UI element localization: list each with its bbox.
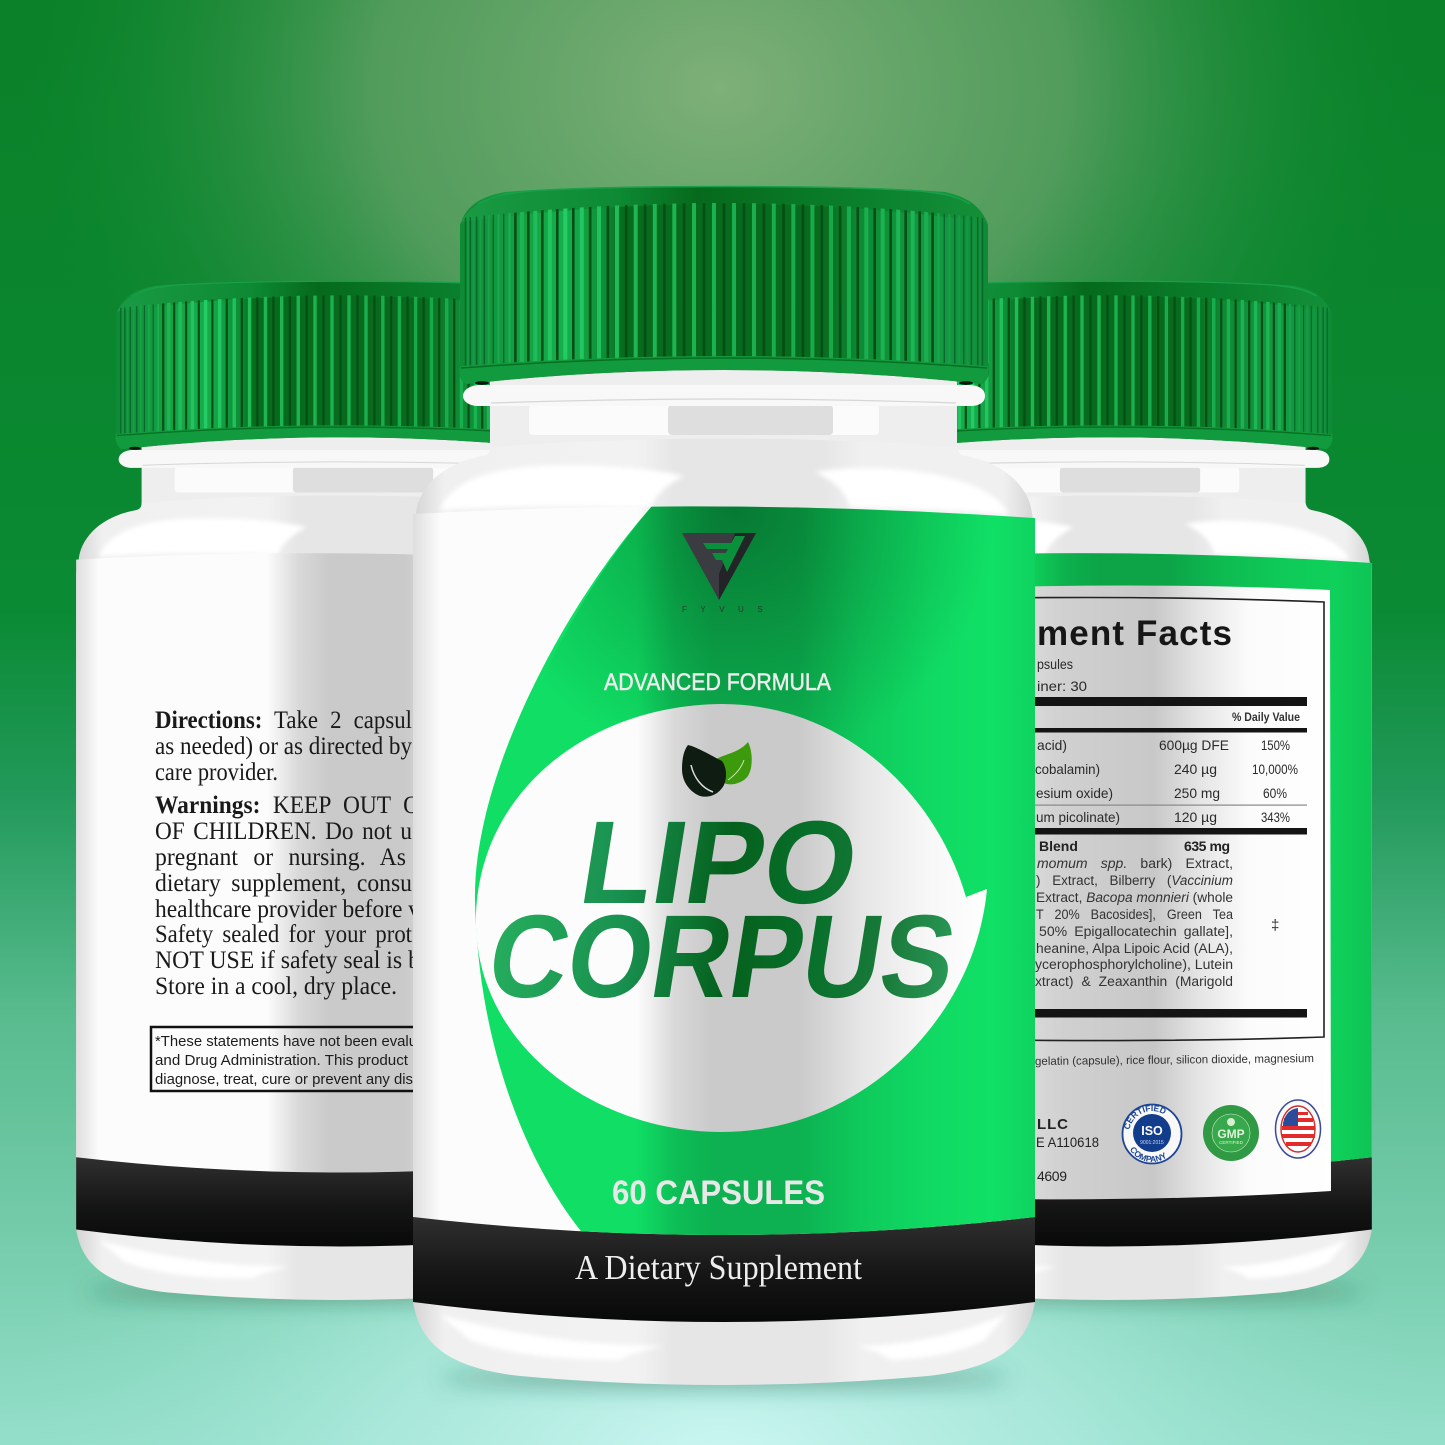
leaf icon xyxy=(682,742,752,797)
facts table: xtract) & Zeaxanthin (Marigold xyxy=(1035,974,1233,989)
badge: GMP: CERTIFIED xyxy=(1219,1140,1244,1145)
capsule count: 60 CAPSULES xyxy=(612,1174,825,1212)
facts table: 250 mg xyxy=(1174,785,1220,801)
floor shadow xyxy=(85,1283,1365,1387)
facts table: ‡ xyxy=(1271,917,1279,934)
facts table: T 20% Bacosides], Green Tea xyxy=(1036,907,1233,922)
directions text xyxy=(155,707,412,786)
facts table: 10,000% xyxy=(1252,761,1298,777)
warnings text: OF CHILDREN. Do not u xyxy=(155,818,412,845)
brand logo: FYVUS xyxy=(682,605,776,614)
front bottle body xyxy=(413,365,1035,1385)
FDA disclaimer box: diagnose, treat, cure or prevent any dis xyxy=(155,1071,413,1088)
badge: ISO xyxy=(1122,1104,1182,1164)
top darkening of green xyxy=(556,506,964,720)
warnings text: dietary supplement, consu xyxy=(155,870,412,897)
front bottle xyxy=(413,170,1060,1385)
facts table: cobalamin) xyxy=(1035,761,1100,777)
badge: ISO: 9001:2015 xyxy=(1140,1140,1164,1146)
FDA disclaimer box: and Drug Administration. This product xyxy=(155,1052,409,1069)
facts table: Blend xyxy=(1039,838,1078,854)
manufacturer text xyxy=(1036,1116,1099,1184)
warnings text: Store in a cool, dry place. xyxy=(155,973,397,1000)
warnings text: healthcare provider before v xyxy=(155,896,420,923)
warnings text: Warnings: KEEP OUT O xyxy=(155,792,420,819)
facts table: 150% xyxy=(1261,737,1290,753)
directions text: Directions: Take 2 capsul xyxy=(155,707,412,734)
warnings text: Safety sealed for your prot xyxy=(155,921,412,948)
FDA disclaimer box: *These statements have not been evalu xyxy=(155,1033,417,1050)
facts table: Extract, Bacopa monnieri (whole xyxy=(1036,890,1233,905)
facts table: 120 µg xyxy=(1174,809,1217,825)
facts table: 635 mg xyxy=(1184,838,1230,854)
green label background xyxy=(474,506,1035,1235)
facts table: ) Extract, Bilberry (Vaccinium xyxy=(1036,873,1233,888)
facts table: heanine, Alpa Lipoic Acid (ALA), xyxy=(1036,941,1233,956)
right bottle cap xyxy=(882,267,1333,463)
warnings text: NOT USE if safety seal is b xyxy=(155,947,420,974)
manufacturer text: E A110618 xyxy=(1036,1134,1099,1150)
facts table: um picolinate) xyxy=(1036,809,1120,825)
badge: ISO: COMPANY xyxy=(1130,1147,1166,1162)
badge: GMP xyxy=(1203,1105,1259,1161)
FDA disclaimer box xyxy=(151,1027,451,1091)
facts box outline xyxy=(1000,598,1324,1041)
facts table: esium oxide) xyxy=(1036,785,1113,801)
facts table xyxy=(1000,697,1307,1018)
serving info: iner: 30 xyxy=(1037,678,1087,694)
directions text: care provider. xyxy=(155,759,278,786)
left bottle: directions side xyxy=(76,267,605,1300)
warnings text: pregnant or nursing. As xyxy=(155,844,406,871)
left bottle body xyxy=(76,433,605,1300)
serving info: psules xyxy=(1037,656,1073,672)
badge: USA flag xyxy=(1276,1100,1320,1158)
facts table: 240 µg xyxy=(1174,761,1217,777)
serving info xyxy=(1037,656,1087,694)
product name: LIPO CORPUS: LIPO xyxy=(572,798,867,929)
facts table: 50% Epigallocatechin gallate], xyxy=(1039,924,1233,939)
facts table: 343% xyxy=(1261,809,1290,825)
label metallic shading xyxy=(413,506,1035,1235)
white facts panel xyxy=(1000,586,1331,1199)
front bottle cap xyxy=(459,170,989,400)
manufacturer text: 4609 xyxy=(1037,1168,1067,1184)
facts table: 60% xyxy=(1263,785,1287,801)
facts table: ycerophosphorylcholine), Lutein xyxy=(1035,957,1233,972)
white leaf shape xyxy=(476,704,987,1132)
product name: LIPO CORPUS: CORPUS xyxy=(480,892,965,1023)
facts table: acid) xyxy=(1037,737,1067,753)
facts table: % Daily Value xyxy=(1232,712,1300,724)
advanced formula text: ADVANCED FORMULA xyxy=(604,669,831,696)
tagline on black band: A Dietary Supplement xyxy=(575,1248,862,1287)
right bottle body xyxy=(843,433,1372,1300)
product name: LIPO CORPUS xyxy=(480,798,965,1023)
right bottle: supplement facts side xyxy=(957,280,1372,1300)
left bottle cap xyxy=(115,267,566,463)
warnings text xyxy=(155,792,420,1000)
badge: ISO: CERTIFIED xyxy=(1124,1105,1166,1129)
manufacturer text: LLC xyxy=(1037,1116,1068,1133)
badge: ISO: ISO xyxy=(1141,1124,1163,1138)
facts table: momum spp. bark) Extract, xyxy=(1037,856,1233,871)
directions text: as needed) or as directed by xyxy=(155,733,412,760)
supplement facts title: ment Facts xyxy=(1037,614,1232,653)
facts table: 600µg DFE xyxy=(1159,737,1229,753)
other ingredients: gelatin (capsule), rice flour, silicon dioxide, magnesium xyxy=(1035,1053,1314,1068)
brand logo xyxy=(682,533,776,614)
badge: GMP: GMP xyxy=(1217,1127,1245,1141)
